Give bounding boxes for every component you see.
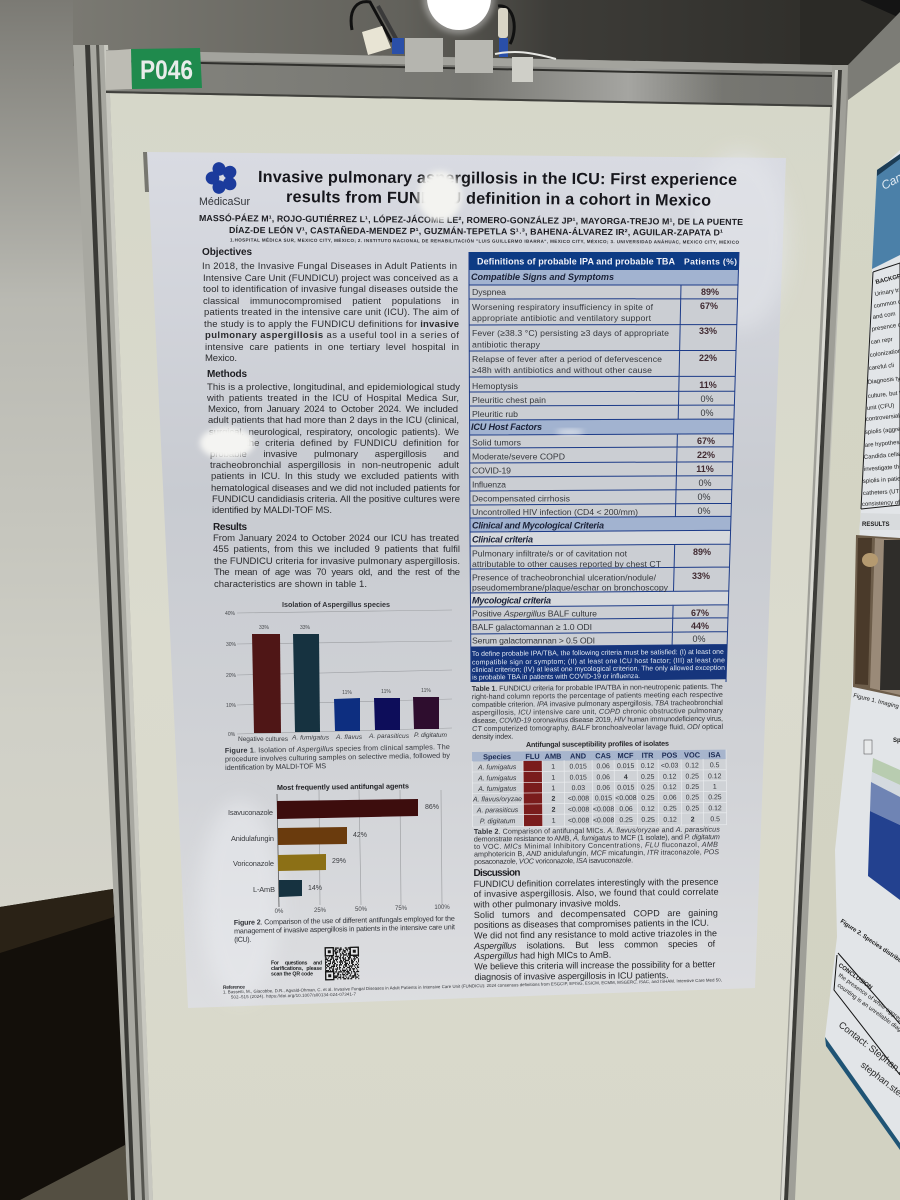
frame: right diagonal rail bbox=[848, 12, 900, 100]
table 2 row: A. flavus/oryzae: <0.008 bbox=[568, 795, 589, 803]
table 2 caption bbox=[474, 825, 721, 866]
table 2 row: A. fumigatus: 0.015 bbox=[570, 774, 587, 782]
table 2 row: A. flavus/oryzae: 0.25 bbox=[641, 795, 655, 802]
table text: clinical and mycological criteria: Pulmonary infiltrate/s or of cavitation not bbox=[472, 548, 628, 558]
discussion section: Discussion bbox=[473, 868, 521, 879]
methods section bbox=[206, 369, 460, 516]
table text: clinical and mycological criteria: Clinical and Mycological Criteria bbox=[472, 520, 604, 530]
table 1 caption bbox=[472, 682, 724, 741]
table text: ICU host factors: Moderate/severe COPD bbox=[472, 452, 565, 462]
table 2: antifungal susceptibility profiles bbox=[471, 750, 727, 827]
table 2 header: ITR bbox=[642, 751, 654, 760]
results section bbox=[213, 522, 460, 590]
table 2 row: A. fumigatus: 4 bbox=[624, 774, 628, 781]
logo: MédicaSur bbox=[199, 160, 250, 208]
table text: clinical and mycological criteria: BALF galactomannan ≥ 1.0 ODI bbox=[472, 622, 592, 632]
table note text: clinical criterion; (IV) at least one mycological criterion. The only allowed exception bbox=[472, 665, 725, 674]
bar: Isavuconazole bbox=[277, 799, 418, 819]
table text: clinical and mycological criteria: Positive Aspergillus BALF culture bbox=[472, 608, 597, 618]
QR code note: For questions and bbox=[271, 960, 322, 966]
reference: Reference bbox=[223, 984, 245, 991]
table 1 caption: disease, COVID-19 coronavirus disease 2019, HIV human immunodeficiency virus, bbox=[472, 714, 723, 725]
table 2 row: A. parasiticus bbox=[476, 805, 722, 814]
table 2 row: A. parasiticus: <0.008 bbox=[568, 806, 589, 814]
table text: compatible signs and symptoms: appropriate antibiotic and ventilatory support bbox=[472, 313, 652, 323]
table text: clinical and mycological criteria: pseudomembrane/plaque/eschar on bronchoscopy bbox=[472, 582, 669, 592]
authors: DÍAZ-DE LEÓN V¹, CASTAÑEDA-MENDEZ P¹, GUZMÁN-TEPETLA S¹˒³, BAHENA-ÁLVAREZ IR², AGUILAR-ZAPATA D¹ bbox=[229, 224, 723, 238]
table text: clinical and mycological criteria: attributable to other causes reported by chest CT bbox=[472, 559, 662, 569]
methods section: Methods bbox=[207, 369, 247, 380]
horizontal bar chart: most frequently used antifungal agents: L-AmB bbox=[253, 885, 275, 894]
table text: compatible signs and symptoms bbox=[471, 272, 669, 419]
table values: clinical and mycological criteria: 67% bbox=[691, 608, 709, 618]
table 2 header bbox=[483, 750, 721, 761]
table values: compatible signs and symptoms: 67% bbox=[700, 301, 718, 311]
bar chart: isolation of Aspergillus species: 33% bbox=[300, 625, 311, 631]
background: lower left dark furniture and floor bbox=[0, 889, 130, 1200]
QR code bbox=[325, 947, 359, 980]
horizontal bar chart: most frequently used antifungal agents: 14% bbox=[308, 885, 322, 892]
methods section: applied the criteria defined by FUNDICU definition for bbox=[209, 438, 459, 449]
table 2 row: A. parasiticus: 2 bbox=[552, 807, 556, 814]
table 2 row: A. fumigatus: 0.12 bbox=[663, 774, 677, 781]
table values: ICU host factors bbox=[696, 436, 715, 516]
bar: Voriconazole bbox=[278, 854, 326, 871]
table 2 row: P. digitatum: <0.008 bbox=[568, 817, 589, 825]
bar chart: isolation of Aspergillus species: 11% bbox=[342, 690, 352, 696]
table text: clinical and mycological criteria bbox=[472, 520, 669, 646]
bar chart: isolation of Aspergillus species bbox=[225, 600, 452, 743]
neighbour poster contact bbox=[825, 1020, 900, 1150]
table 2 row: A. flavus/oryzae: A. flavus/oryzae bbox=[472, 796, 522, 804]
bar: P. digitatum bbox=[413, 697, 439, 729]
methods section: identified by MALDI-TOF MS. bbox=[212, 505, 332, 516]
QR code note: clarifications, please bbox=[271, 966, 322, 972]
table note text bbox=[472, 649, 725, 681]
table 2 row: A. parasiticus: 0.12 bbox=[641, 806, 655, 813]
bar chart: isolation of Aspergillus species: 11% bbox=[381, 689, 391, 695]
objectives section: Objectives bbox=[202, 247, 252, 258]
table text: compatible signs and symptoms: Fever (≥38.3 °C) persisting ≥3 days of appropriate bbox=[472, 328, 669, 338]
figure 2 caption bbox=[234, 914, 455, 944]
table text: compatible signs and symptoms: Dyspnea bbox=[472, 287, 506, 297]
table values: compatible signs and symptoms: 33% bbox=[699, 326, 717, 336]
results section: Results bbox=[213, 522, 247, 533]
table 2 header: VOC bbox=[684, 750, 701, 760]
results section: the FUNDICU criteria for invasive pulmonary aspergillosis. bbox=[214, 556, 460, 567]
table 2 row: A. fumigatus: 1 bbox=[713, 784, 717, 791]
neighbour poster background box: unit (CFU) bbox=[867, 403, 895, 412]
table 2 row: A. fumigatus: 0.25 bbox=[641, 784, 655, 791]
methods section: adult patients that had more than 2 days in the ICU (clinical, bbox=[208, 415, 459, 426]
table text: clinical and mycological criteria: Presence of tracheobronchial ulceration/nodule/ bbox=[472, 572, 657, 582]
figure 2 caption: Figure 2. Comparison of the use of different antifungals employed for the bbox=[234, 914, 455, 927]
frame: top aluminium rail bbox=[106, 50, 832, 107]
horizontal bar chart: most frequently used antifungal agents: 86% bbox=[425, 804, 439, 811]
frame: left aluminium post bbox=[73, 45, 153, 1200]
results section: From January 2024 to October 2024 our ICU has treated bbox=[213, 533, 459, 544]
table text: compatible signs and symptoms: Pleuritic rub bbox=[472, 409, 518, 419]
table 2 row: A. fumigatus: 0.25 bbox=[685, 773, 699, 781]
objectives section: pulmonary aspergillosis as a useful tool in a series of bbox=[205, 330, 459, 341]
table 2 row: A. fumigatus: 0.015 bbox=[617, 784, 635, 792]
table values: ICU host factors: 22% bbox=[697, 450, 715, 460]
table 2 row: A. flavus/oryzae: <0.008 bbox=[615, 795, 637, 802]
table note box bbox=[471, 644, 727, 682]
table 2 row: A. flavus/oryzae: 0.015 bbox=[595, 795, 612, 802]
table 1 caption: aspergillosis, ICU intensive care unit, COPD chronic obstructive pulmonary bbox=[472, 706, 723, 717]
bar: Anidulafungin bbox=[278, 827, 347, 845]
table 1 caption: compatible criterion. IPA invasive pulmonary aspergillosis, TBA tracheobronchial bbox=[472, 698, 723, 709]
table values: compatible signs and symptoms bbox=[699, 287, 719, 418]
table header row: Patients (%) bbox=[684, 256, 737, 266]
table 2 row: A. fumigatus: 0.06 bbox=[596, 763, 610, 770]
neighbour poster background box: Urinary tr bbox=[874, 288, 900, 298]
logo: MédicaSur: MédicaSur bbox=[199, 196, 250, 208]
table values: compatible signs and symptoms: 11% bbox=[699, 380, 717, 390]
table 2 header: Species bbox=[483, 752, 511, 761]
figure 1 caption: Figure 1. Isolation of Aspergillus species from clinical samples. The bbox=[225, 742, 450, 755]
bar chart: isolation of Aspergillus species: 20% bbox=[226, 673, 237, 679]
table values: compatible signs and symptoms: 22% bbox=[699, 353, 717, 363]
table values: ICU host factors: 0% bbox=[697, 506, 711, 516]
results section: 455 patients, from this we included 9 patients that fulfil bbox=[213, 544, 460, 555]
bar: A. flavus bbox=[334, 698, 360, 731]
table 2 row: P. digitatum: 0.25 bbox=[641, 817, 655, 824]
table text: clinical and mycological criteria: Serum galactomannan > 0.5 ODI bbox=[472, 636, 595, 646]
table 2 row: P. digitatum: P. digitatum bbox=[480, 818, 516, 825]
table 2 row: A. fumigatus bbox=[477, 784, 717, 793]
table 2 header: AMB bbox=[545, 752, 562, 761]
table 2 row: A. parasiticus: <0.008 bbox=[593, 806, 614, 813]
bar: A. fumigatus bbox=[293, 634, 320, 732]
neighbour poster background box bbox=[861, 263, 900, 509]
frame: right aluminium post bbox=[780, 65, 848, 1200]
horizontal bar chart: most frequently used antifungal agents: Anidulafungin bbox=[231, 834, 274, 843]
table text: ICU host factors: Decompensated cirrhosis bbox=[472, 494, 571, 504]
table text: compatible signs and symptoms: Worsening respiratory insufficiency in spite of bbox=[472, 302, 654, 312]
table 2 row: A. flavus/oryzae: 0.25 bbox=[708, 794, 722, 801]
table 2 caption: posaconazole, VOC voriconazole, ISA isavuconazole. bbox=[474, 855, 633, 866]
bar chart: isolation of Aspergillus species: 33% bbox=[259, 625, 270, 631]
table 2 title: Antifungal susceptibility profiles of isolates bbox=[526, 739, 669, 749]
methods section: surgical, neurological, respiratory, oncologic patients). We bbox=[209, 427, 459, 438]
horizontal bar chart: most frequently used antifungal agents: Most frequently used antifungal agents bbox=[277, 781, 409, 792]
table values: compatible signs and symptoms: 0% bbox=[700, 394, 714, 404]
title bbox=[258, 168, 737, 210]
table values: clinical and mycological criteria bbox=[691, 547, 711, 644]
discussion section: We did not find any resistance to mold active triazoles in the bbox=[474, 928, 717, 940]
table text: compatible signs and symptoms: ≥48h with antibiotics and without other cause bbox=[472, 365, 652, 375]
table values: clinical and mycological criteria: 89% bbox=[693, 547, 711, 557]
discussion section: We believe this criteria will increase the possibility for a better bbox=[474, 959, 715, 971]
table 2 header: ISA bbox=[708, 750, 721, 759]
objectives section: Intensive Care Unit (FUNDICU) project was conceived as a bbox=[203, 273, 459, 284]
table values: ICU host factors: 0% bbox=[697, 492, 711, 502]
table values: ICU host factors: 11% bbox=[696, 464, 714, 474]
table text: clinical and mycological criteria: Mycological criteria bbox=[472, 596, 551, 606]
reference: 502–515 (2024). https://doi.org/10.1007/s00134-024-07341-7 bbox=[231, 991, 357, 999]
neighbour poster conclusion box: CONCLUSION bbox=[837, 963, 873, 991]
bar chart: isolation of Aspergillus species: 0% bbox=[228, 732, 236, 738]
table 2 row: P. digitatum: <0.008 bbox=[593, 817, 614, 824]
lamp and mounting hardware bbox=[351, 0, 556, 82]
figure 1 caption: procedure involves culturing samples on selective media, followed by bbox=[225, 751, 450, 763]
neighbour poster conclusion box bbox=[834, 919, 900, 1075]
table note text: To define probable IPA/TBA, the following criteria must be satisfied: (I) at least one bbox=[472, 649, 724, 658]
title: Invasive pulmonary aspergillosis in the ICU: First experience bbox=[258, 168, 737, 189]
table 2 row: P. digitatum: 1 bbox=[552, 818, 556, 825]
neighbour poster header bbox=[872, 154, 900, 269]
neighbouring poster on right bbox=[825, 150, 900, 1150]
table values: clinical and mycological criteria: 33% bbox=[692, 571, 710, 581]
table 1 caption: CT computerized tomography, BALF bronchoalveolar lavage fluid, ODI optical bbox=[472, 722, 724, 733]
table 2 row: A. fumigatus: 0.015 bbox=[569, 763, 587, 771]
table 2 header: POS bbox=[662, 751, 677, 760]
discussion section: Aspergillus had high MICs to AmB. bbox=[473, 950, 611, 961]
table note text: compatible sign or symptom; (II) at least one ICU host factor; (III) at least one bbox=[472, 657, 725, 667]
table values: ICU host factors: 0% bbox=[698, 478, 712, 488]
table 2 row: P. digitatum: 0.12 bbox=[663, 817, 677, 824]
table 2 caption: demonstrate resistance to AMB, A. fumigatus to MCF (1 isolate), and P. digitatum bbox=[474, 832, 720, 844]
figure 1 caption bbox=[225, 742, 451, 772]
table 2 row: A. fumigatus: A. fumigatus bbox=[477, 786, 517, 793]
discussion section: Solid tumors and decompensated COPD are gaining bbox=[474, 908, 718, 920]
horizontal bar chart: most frequently used antifungal agents: Voriconazole bbox=[233, 859, 274, 868]
authors bbox=[199, 212, 743, 238]
table 2 header: AND bbox=[570, 751, 587, 761]
table 1: definitions of probable IPA and probable TBA bbox=[469, 252, 739, 682]
table 2 row: A. parasiticus: 0.06 bbox=[619, 806, 633, 813]
table 2 row: A. fumigatus: 0.06 bbox=[597, 774, 610, 781]
table 2 row: A. flavus/oryzae: 2 bbox=[551, 796, 556, 803]
objectives section: the study is to apply the FUNDICU definitions for invasive bbox=[204, 319, 459, 330]
table text: ICU host factors: ICU Host Factors bbox=[471, 422, 542, 432]
table note text: is probable TBA in patients with COVID-19 or influenza. bbox=[472, 673, 640, 681]
horizontal bar chart: most frequently used antifungal agents: 100% bbox=[434, 905, 450, 911]
figure 1 caption: identification by MALDI-TOF MS bbox=[225, 761, 326, 772]
methods section: hematological diseases and we did not included patients for bbox=[211, 483, 460, 494]
objectives section: intensive care patients in one tertiary level hospital in bbox=[205, 342, 459, 353]
bar chart: isolation of Aspergillus species: A. parasiticus bbox=[368, 733, 410, 740]
table 2 header: MCF bbox=[617, 751, 634, 760]
figure 2 caption: management of invasive aspergillosis in patients in the intensive care unit bbox=[234, 922, 455, 935]
table 2 header: CAS bbox=[595, 751, 611, 760]
table 2 caption: to VOC. MICs Minimal Inhibitory Concentrations, FLU fluconazol, AMB bbox=[474, 840, 718, 851]
table 2 row: A. fumigatus: 0.015 bbox=[617, 763, 634, 770]
objectives section: In 2018, the Invasive Fungal Diseases in Adult Patients in bbox=[202, 261, 457, 272]
board: main white panel bbox=[108, 93, 833, 1200]
methods section: FUNDICU candidiasis criteria. All the positive cultures were bbox=[212, 494, 460, 505]
objectives section: classical immunocompromised patient populations in bbox=[203, 296, 459, 307]
title: results from FUNDICU definition in a cohort in Mexico bbox=[286, 188, 711, 210]
results section: The mean of age was 70 years old, and the rest of the bbox=[214, 567, 460, 578]
discussion section: diagnosis of invasive aspergillosis in ICU patients. bbox=[474, 970, 668, 982]
table text: ICU host factors: Uncontrolled HIV infection (CD4 < 200/mm) bbox=[472, 507, 638, 517]
glare: reflection on table bbox=[556, 430, 584, 434]
table 2 caption: Table 2. Comparison of antifungal MICs. A. flavus/oryzae and A. parasiticus bbox=[474, 825, 720, 836]
bar chart: isolation of Aspergillus species: 10% bbox=[226, 703, 237, 709]
discussion section: FUNDICU definition correlates interestingly with the presence bbox=[474, 877, 719, 889]
methods section: tracheobronchial aspergillosis in non-neutropenic adult bbox=[210, 460, 459, 471]
table 2 row: A. fumigatus: 0.12 bbox=[641, 763, 655, 770]
table 2 row: A. fumigatus bbox=[477, 762, 720, 771]
table text: ICU host factors bbox=[471, 422, 638, 517]
glare: reflection on methods text bbox=[200, 427, 254, 459]
methods section: probable invasive pulmonary aspergillosis and bbox=[210, 449, 459, 460]
table 2 row: P. digitatum: 0.25 bbox=[619, 817, 633, 824]
methods section: Mexico, from January 2024 to October 2024. We included bbox=[208, 404, 458, 415]
methods section: with patients treated in the ICU of Hospital Medica Sur, bbox=[206, 393, 459, 404]
table 2 row: A. fumigatus: 1 bbox=[551, 785, 555, 792]
table 2 row: A. fumigatus: 0.12 bbox=[663, 784, 677, 791]
neighbour poster background box: careful cli bbox=[869, 363, 894, 372]
table 2 caption: amphotericin B, AND anidulafungin, MCF micafungin, ITR itraconazole, POS bbox=[474, 847, 719, 858]
objectives section bbox=[202, 247, 459, 364]
table 1 caption: right-hand column reports the percentage of patients meeting each respective bbox=[472, 690, 723, 701]
table 2 row: A. fumigatus: 1 bbox=[551, 775, 555, 782]
table text: compatible signs and symptoms: Relapse of fever after a period of defervescence bbox=[472, 354, 662, 364]
table 2 row: A. flavus/oryzae: 0.25 bbox=[686, 794, 699, 802]
table values: ICU host factors: 67% bbox=[697, 436, 715, 446]
table text: compatible signs and symptoms: Hemoptysis bbox=[472, 381, 519, 391]
table 2 row: A. fumigatus: 0.12 bbox=[708, 773, 722, 780]
bar chart: isolation of Aspergillus species: 11% bbox=[421, 688, 431, 694]
table 2 row: A. fumigatus: 1 bbox=[551, 764, 555, 771]
table 2 header: FLU bbox=[525, 752, 540, 761]
table 2 row: A. fumigatus bbox=[477, 773, 722, 782]
table 2 row: A. parasiticus: 0.12 bbox=[708, 805, 722, 812]
background: dark upper wall bbox=[73, 0, 900, 66]
objectives section: patients treated in the intensive care unit (ICU). The aim of bbox=[204, 307, 459, 318]
table values: compatible signs and symptoms: 89% bbox=[701, 287, 719, 297]
discussion section: with other pulmonary invasive molds. bbox=[473, 898, 621, 910]
table 2 row: P. digitatum: 0.5 bbox=[710, 816, 720, 823]
table 2 row: P. digitatum bbox=[480, 816, 720, 825]
table 2 row: A. fumigatus: <0.03 bbox=[661, 763, 679, 770]
horizontal bar chart: most frequently used antifungal agents: 29% bbox=[332, 858, 346, 865]
neighbour poster background box: can repr bbox=[870, 337, 893, 346]
bar chart: isolation of Aspergillus species: A. fumigatus bbox=[291, 734, 330, 742]
horizontal bar chart: most frequently used antifungal agents: 0% bbox=[275, 909, 284, 915]
authors: MASSÓ-PÁEZ M¹, ROJO-GUTIÉRREZ L¹, LÓPEZ-JÁCOME LE², ROMERO-GONZÁLEZ JP¹, MAYORGA-TREJO M¹, DE LA PUENTE bbox=[199, 212, 743, 227]
table 2 row: A. fumigatus: 0.25 bbox=[686, 784, 699, 791]
horizontal bar chart: most frequently used antifungal agents: 42% bbox=[353, 832, 367, 839]
background: brick corner bbox=[800, 0, 900, 66]
table 2 row: A. parasiticus: 0.25 bbox=[686, 805, 699, 813]
discussion section: Aspergillus isolations. But less common species of bbox=[473, 939, 716, 951]
reference: 1. Bassetti, M., Giacobbe, D.R., Agvald-Ohman, C. et al. Invasive Fungal Diseases in Adult Patients in Intensive Care Unit (FUNDICU): 2024 consensus definitions from ESGCIP, EFISG, ESICM, ECMM, MSGERC, ISAC, and ISHAM. Intensive Care Med 50, bbox=[223, 977, 722, 994]
table 2 row: A. fumigatus: A. fumigatus bbox=[477, 764, 517, 771]
table text: compatible signs and symptoms: antibiotic therapy bbox=[472, 340, 541, 350]
table 1 caption: density index. bbox=[472, 732, 513, 741]
table values: clinical and mycological criteria: 44% bbox=[691, 621, 709, 631]
neighbour poster background box: and com bbox=[872, 311, 896, 321]
table 2 row: A. parasiticus: A. parasiticus bbox=[476, 807, 519, 814]
table 2 row: A. flavus/oryzae bbox=[472, 794, 722, 804]
bar chart: isolation of Aspergillus species: 40% bbox=[225, 611, 236, 617]
right neighbouring board bbox=[795, 60, 900, 1200]
horizontal bar chart: most frequently used antifungal agents: 50% bbox=[355, 907, 368, 913]
table 2 row: A. fumigatus: 0.5 bbox=[710, 762, 720, 769]
poster sheet bbox=[143, 150, 790, 1008]
table 2 row: A. fumigatus: 0.25 bbox=[641, 774, 655, 781]
table text: ICU host factors: COVID-19 bbox=[472, 466, 511, 476]
table 2 row: A. parasiticus: 0.25 bbox=[663, 806, 677, 813]
table header row: Definitions of probable IPA and probable TBA bbox=[477, 256, 676, 266]
table 1 caption: Table 1. FUNDICU criteria for probable IPA/TBA in non-neutropenic patients. The bbox=[472, 682, 723, 693]
horizontal bar chart: most frequently used antifungal agents bbox=[228, 781, 450, 915]
table text: compatible signs and symptoms: Pleuritic chest pain bbox=[472, 395, 546, 405]
discussion section: positions as diseases that compromises patients in the ICU. bbox=[474, 918, 709, 930]
affiliations: 1.HOSPITAL MÉDICA SUR, MEXICO CITY, MÉXICO; 2. INSTITUTO NACIONAL DE REHABILITACIÓN "LUIS GUILLERMO IBARRA", MEXICO CITY, MÉXICO; 3. UNIVERSIDAD ANÁHUAC, MEXICO CITY, MEXICO bbox=[230, 236, 740, 245]
horizontal bar chart: most frequently used antifungal agents: Isavuconazole bbox=[228, 808, 273, 817]
number tag: P046 bbox=[106, 48, 202, 90]
horizontal bar chart: most frequently used antifungal agents: 75% bbox=[395, 906, 408, 912]
table 2 row: A. fumigatus: 0.06 bbox=[597, 785, 610, 792]
table header row bbox=[469, 252, 739, 270]
objectives section: Mexico. bbox=[205, 353, 237, 364]
table text: compatible signs and symptoms: Compatible Signs and Symptoms bbox=[471, 272, 614, 282]
table 2 row: A. fumigatus: A. fumigatus bbox=[477, 775, 517, 782]
table 2 row: A. flavus/oryzae: 0.06 bbox=[663, 795, 677, 802]
table text: clinical and mycological criteria: Clinical criteria bbox=[472, 534, 533, 544]
bar: Negative cultures bbox=[252, 634, 281, 733]
QR code note bbox=[271, 960, 322, 978]
table 2 row: P. digitatum: 2 bbox=[691, 816, 695, 823]
number tag: P046: P046 bbox=[140, 55, 193, 85]
methods section: This is a prolective, longitudinal, and epidemiological study bbox=[207, 382, 460, 393]
horizontal bar chart: most frequently used antifungal agents: 25% bbox=[314, 908, 327, 914]
bar chart: isolation of Aspergillus species: 30% bbox=[226, 642, 237, 648]
discussion section: of invasive aspergillosis. Also, we found that could correlate bbox=[474, 887, 719, 899]
bar chart: isolation of Aspergillus species: Isolation of Aspergillus species bbox=[282, 600, 390, 609]
neighbour poster photograph bbox=[853, 535, 900, 697]
table 2 row: A. fumigatus: 0.03 bbox=[572, 785, 585, 792]
neighbour poster chart bbox=[864, 738, 900, 900]
QR code note: scan the QR code bbox=[271, 972, 313, 978]
bar: A. parasiticus bbox=[374, 698, 400, 730]
bar chart: isolation of Aspergillus species: P. digitatum bbox=[414, 732, 448, 739]
neighbour poster results heading bbox=[859, 513, 900, 530]
objectives section: tool to identification of invasive fungal diseases outside the bbox=[203, 284, 458, 295]
table text: ICU host factors: Solid tumors bbox=[472, 438, 522, 448]
table text: ICU host factors: Influenza bbox=[472, 480, 506, 490]
figure 2 caption: (ICU). bbox=[234, 935, 251, 944]
discussion section bbox=[472, 866, 719, 982]
bar: L-AmB bbox=[279, 880, 302, 897]
glare: reflection on title bbox=[418, 171, 462, 221]
table 2 row: A. fumigatus: 0.12 bbox=[685, 762, 699, 770]
table values: clinical and mycological criteria: 0% bbox=[692, 634, 706, 644]
methods section: patients in ICU. In this study we excluded patients with bbox=[211, 471, 459, 482]
table values: compatible signs and symptoms: 0% bbox=[700, 408, 714, 418]
bar chart: isolation of Aspergillus species: A. flavus bbox=[335, 734, 363, 741]
results section: characteristics are shown in table 1. bbox=[214, 579, 367, 590]
neighbour poster results heading: RESULTS bbox=[862, 522, 890, 528]
bar chart: isolation of Aspergillus species: Negative cultures bbox=[238, 736, 289, 743]
